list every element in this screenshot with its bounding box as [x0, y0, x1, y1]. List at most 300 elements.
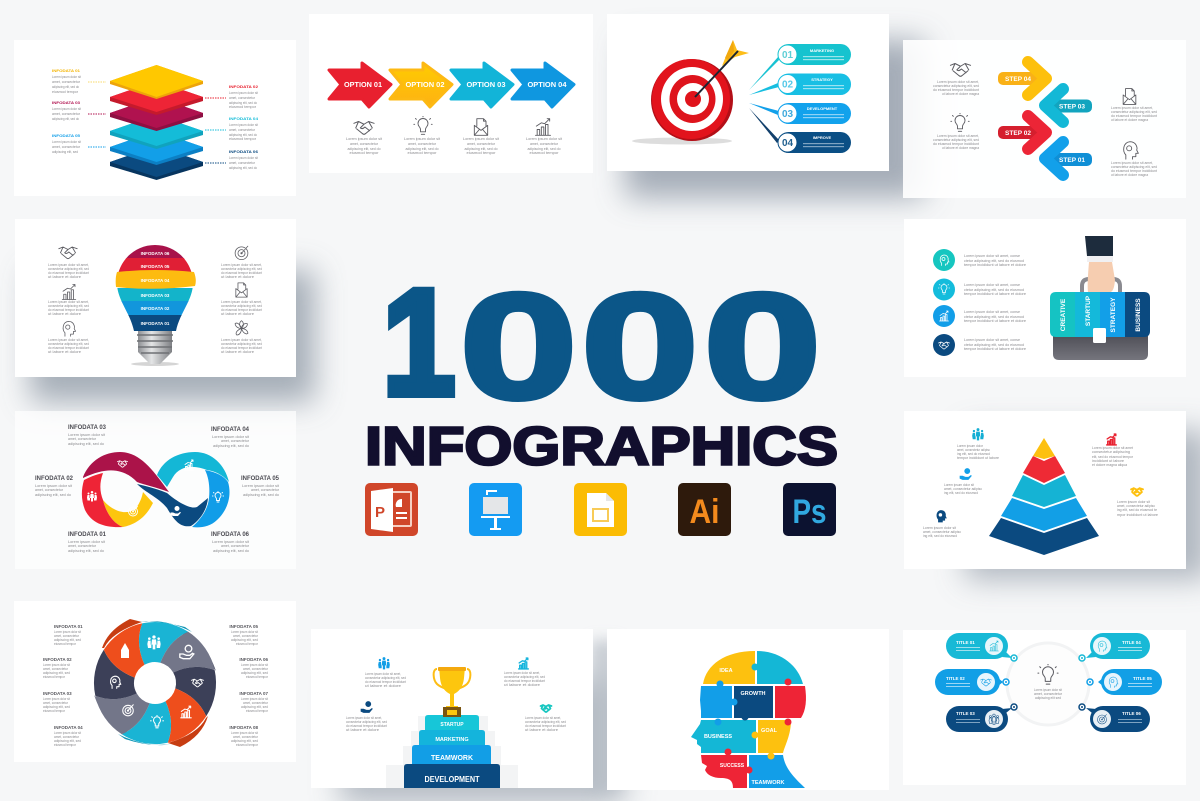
label: infodata 01: Lorem ipsum dolor sit [68, 539, 106, 544]
briefcase with hand: BUSINESS [1135, 298, 1142, 332]
center ring [1007, 643, 1089, 725]
trophy text blocks: do eiusmod tempor incididunt [365, 679, 407, 684]
cycle labels right: Lorem ipsum dolor sit [231, 629, 259, 634]
label: infodata 04: Lorem ipsum dolor sit [212, 434, 250, 439]
pill: title 02 [935, 669, 1003, 695]
step text blocks: Lorem ipsum dolor sit amet, [1111, 160, 1153, 165]
icon: head [937, 510, 947, 522]
pill: title 06 [1086, 706, 1150, 732]
arrow: option 01: OPTION 01 [344, 82, 382, 89]
label: infodata 02: adipiscing elit, sed do [229, 100, 258, 105]
briefcase text blocks: Lorem ipsum dolor sit amet, conse [964, 253, 1021, 258]
label: infodata 06: INFODATA 06 [229, 149, 259, 154]
cycle labels right: Lorem ipsum dolor sit [231, 730, 259, 735]
icon: flower [235, 321, 248, 335]
label: infodata 03: Lorem ipsum dolor sit [52, 106, 82, 111]
label: infodata 06: Lorem ipsum dolor sit [229, 155, 259, 160]
text blocks under arrows: amet, consectetur [467, 141, 496, 146]
label: infodata 06: amet, consectetur [221, 543, 250, 548]
cycle labels left: amet, consectetur [43, 666, 69, 671]
label: infodata 03: adipiscing elit, sed do [68, 441, 105, 446]
bulb text blocks: consectetur adipiscing elit, sed [48, 266, 89, 271]
briefcase text blocks: tempor incididunt ut labore et dolore [964, 318, 1027, 323]
cycle labels right: Lorem ipsum dolor sit [241, 662, 269, 667]
icon: handshake [540, 705, 552, 712]
cycle labels right: adipiscing elit, sed [231, 738, 258, 743]
pyramid text blocks: ing elit, sed do eiusmod [923, 533, 957, 538]
cycle labels right: adipiscing elit, sed [231, 637, 258, 642]
label: infodata 03: amet, consectetur [52, 111, 81, 116]
briefcase text blocks: ctetur adipiscing elit, sed do eiusmod [964, 314, 1024, 319]
text blocks under arrows: Lorem ipsum dolor sit [404, 136, 441, 141]
label: infodata 03 [68, 425, 107, 446]
cycle labels right: INFODATA 07 [239, 691, 268, 696]
bulb text blocks: ut labore et dolore [48, 274, 82, 279]
pyramid text blocks: ing elit, sed do eiusmod [944, 490, 978, 495]
briefcase text blocks [964, 253, 1027, 351]
pyramid text blocks: amet, consectetur adipisc [923, 529, 961, 534]
trophy text blocks: Lorem ipsum dolor sit amet, [504, 670, 540, 675]
step text blocks: ut labore et dolore magna [942, 91, 980, 96]
cycle labels right: INFODATA 08 [229, 725, 258, 730]
pill 01 marketing: 01 [782, 50, 793, 61]
steps: DEVELOPMENT [424, 774, 480, 784]
text blocks under arrows: Lorem ipsum dolor sit [526, 136, 563, 141]
pyramid text blocks: ing elit, sed do eiusmod te [1117, 507, 1158, 512]
cycle labels right: amet, consectetur [233, 734, 259, 739]
pill 01 marketing: MARKETING [810, 48, 834, 53]
steps: STARTUP [440, 722, 464, 728]
label: infodata 06: adipiscing elit, sed do [213, 548, 250, 553]
label: infodata 01: eiusmod tempor [52, 89, 79, 94]
label: infodata 02: amet, consectetur [35, 487, 64, 492]
bulb text blocks: do eiusmod tempor incididunt [48, 307, 90, 312]
label: infodata 03: amet, consectetur [68, 436, 97, 441]
label: infodata 01: adipiscing elit, sed do [52, 84, 80, 89]
pyramid text blocks: Lorem ipsum dolor sit [944, 482, 975, 487]
icon: illustrator: Ai [690, 493, 720, 531]
cycle labels left: Lorem ipsum dolor sit [43, 662, 71, 667]
icon: mail [474, 119, 488, 135]
cycle labels left: INFODATA 02 [43, 657, 72, 662]
briefcase text blocks: tempor incididunt ut labore et dolore [964, 291, 1027, 296]
step text blocks: Lorem ipsum dolor sit amet, [937, 133, 979, 138]
arrow: option 04 [512, 63, 574, 107]
label: infodata 05: amet, consectetur [52, 144, 81, 149]
briefcase text blocks: ctetur adipiscing elit, sed do eiusmod [964, 342, 1024, 347]
panel: puzzle head [607, 629, 889, 790]
pill 04 improve: 04 [782, 138, 793, 149]
label: infodata 01 [52, 68, 82, 94]
trophy text blocks: ut labore et dolore [346, 727, 380, 732]
puzzle head graphic: SUCCESS [720, 763, 745, 769]
pill: title 06: TITLE 06 [1122, 711, 1141, 716]
icon: money hand [361, 701, 373, 713]
connector lines [749, 57, 779, 143]
icon: bulb [951, 113, 969, 131]
arrow: option 03: OPTION 03 [466, 82, 506, 89]
trophy text blocks: consectetur adipiscing elit, sed [525, 719, 566, 724]
briefcase text blocks: tempor incididunt ut labore et dolore [964, 262, 1027, 267]
pyramid text blocks: incididunt ut labore [1092, 458, 1125, 463]
text blocks under arrows: eiusmod tempor [530, 150, 559, 155]
icon: handshake [354, 122, 374, 134]
label: infodata 01: adipiscing elit, sed do [68, 548, 105, 553]
bulb graphic: INFODATA 06 [141, 251, 170, 256]
bulb text blocks: consectetur adipiscing elit, sed [48, 303, 89, 308]
pyramid text blocks: ing elit, sed do eiusmod [957, 451, 990, 456]
label: infodata 02: adipiscing elit, sed do [35, 492, 72, 497]
step text blocks [933, 79, 1158, 177]
step text blocks: consectetur adipiscing elit, sed [933, 137, 979, 142]
target board [632, 59, 733, 144]
label: infodata 03: adipiscing elit, sed do [52, 116, 80, 121]
text blocks under arrows: adipiscing elit, sed do [464, 146, 498, 151]
label: infodata 02: eiusmod tempor [229, 104, 257, 109]
bulb text blocks: do eiusmod tempor incididunt [221, 307, 263, 312]
cycle labels left [43, 624, 83, 747]
pyramid text blocks: consectetur adipiscing [1092, 449, 1130, 454]
puzzle head graphic: GOAL [761, 728, 778, 734]
panel: steps arrows [903, 40, 1186, 198]
cycle labels left: amet, consectetur [54, 633, 80, 638]
text blocks under arrows: eiusmod tempor [466, 150, 496, 155]
panel: briefcase [904, 219, 1186, 377]
icon: people [972, 428, 984, 440]
icon: head [63, 321, 76, 336]
puzzle head graphic: BUSINESS [704, 734, 732, 740]
text blocks under arrows: amet, consectetur [530, 141, 559, 146]
cycle labels right: amet, consectetur [243, 666, 269, 671]
label: infodata 06: adipiscing elit, sed do [229, 165, 258, 170]
bulb text blocks: do eiusmod tempor incididunt [48, 345, 90, 350]
trophy text blocks: ut labore et dolore [525, 727, 559, 732]
briefcase text blocks: Lorem ipsum dolor sit amet, conse [964, 337, 1021, 342]
label: infodata 06: amet, consectetur [229, 160, 256, 165]
icon: target [235, 246, 248, 260]
step text blocks: consectetur adipiscing elit, sed [1111, 164, 1157, 169]
label: infodata 06 [229, 149, 259, 170]
trophy text blocks: do eiusmod tempor incididunt [525, 723, 567, 728]
arrow: step 03: STEP 03 [1059, 104, 1085, 110]
icon: powerpoint: P [375, 504, 385, 521]
label: infodata 04: INFODATA 04 [211, 427, 250, 433]
label: infodata 01: INFODATA 01 [68, 532, 107, 538]
step text blocks: ut labore et dolore magna [942, 145, 980, 150]
cycle labels right: INFODATA 06 [239, 657, 268, 662]
cycle labels right: amet, consectetur [243, 700, 269, 705]
title: infographics: INFOGRAPHICS [365, 416, 838, 476]
label: infodata 01: amet, consectetur [52, 79, 81, 84]
arrow: step 02: STEP 02 [1005, 130, 1031, 137]
step text blocks: consectetur adipiscing elit, sed [933, 83, 979, 88]
bulb text blocks [48, 262, 263, 354]
icon: photoshop [783, 483, 836, 536]
label: infodata 03: Lorem ipsum dolor sit [68, 432, 106, 437]
steps [404, 715, 500, 788]
text blocks under arrows [346, 136, 563, 155]
cycle labels left: Lorem ipsum dolor sit [54, 629, 82, 634]
label: infodata 04 [211, 427, 250, 448]
label: infodata 05: Lorem ipsum dolor sit [52, 139, 82, 144]
puzzle head graphic: IDEA [719, 668, 733, 674]
pyramid text blocks: Lorem ipsum dolor sit [923, 525, 957, 530]
trophy text blocks [346, 670, 567, 732]
arrow: step 02 [998, 116, 1046, 149]
label: infodata 04: adipiscing elit, sed do [213, 443, 250, 448]
bulb text blocks: do eiusmod tempor incididunt [221, 270, 263, 275]
cycle labels left: eiusmod tempor [54, 641, 77, 646]
center ring: amet, consectetur [1034, 691, 1063, 696]
pyramid text blocks [923, 443, 1159, 538]
label: infodata 04: eiusmod tempor [229, 136, 257, 141]
step text blocks: ut labore et dolore magna [1111, 117, 1149, 122]
pill: title 05 [1098, 669, 1162, 695]
step text blocks: Lorem ipsum dolor sit amet, [1111, 105, 1153, 110]
cycle labels left: INFODATA 01 [54, 624, 83, 629]
label: infodata 01: Lorem ipsum dolor sit [52, 74, 82, 79]
text blocks under arrows: amet, consectetur [408, 141, 437, 146]
label: infodata 01: INFODATA 01 [52, 68, 81, 73]
cycle labels left: eiusmod tempor [54, 742, 77, 747]
cycle ring [94, 619, 216, 747]
label: infodata 02: amet, consectetur [229, 95, 256, 100]
trophy text blocks: ut labore et dolore [365, 683, 402, 688]
bulb text blocks: Lorem ipsum dolor sit amet, [221, 337, 262, 342]
briefcase with hand: STARTUP [1085, 295, 1092, 326]
pill 02 strategy: 02 [782, 80, 793, 90]
cycle labels left: amet, consectetur [43, 700, 69, 705]
label: infodata 02 [35, 476, 74, 497]
pyramid text blocks: mpor incididunt ut labore [1117, 512, 1159, 517]
pill 02 strategy [778, 74, 851, 95]
bulb graphic: INFODATA 01 [141, 321, 170, 326]
pyramid text blocks: elit, sed do eiusmod tempor [1092, 454, 1134, 459]
label: infodata 01 [68, 532, 107, 553]
arrow: option 02 [390, 63, 452, 107]
label: infodata 05: INFODATA 05 [241, 476, 280, 482]
trophy text blocks: ut labore et dolore [504, 682, 541, 687]
label: infodata 06: Lorem ipsum dolor sit [212, 539, 250, 544]
bulb text blocks: Lorem ipsum dolor sit amet, [48, 262, 89, 267]
pill: title 04: TITLE 04 [1122, 640, 1141, 645]
label: infodata 05: adipiscing elit, sed [52, 149, 78, 154]
icon: bulb [414, 116, 432, 134]
pyramid text blocks: amet, consectetur adipisc [957, 447, 990, 452]
bulb text blocks: do eiusmod tempor incididunt [48, 270, 90, 275]
icon: chart [519, 658, 528, 669]
pill: title 05: TITLE 05 [1133, 676, 1152, 681]
cycle labels left: adipiscing elit, sed [54, 738, 81, 743]
step text blocks: Lorem ipsum dolor sit amet, [937, 79, 979, 84]
bulb graphic: INFODATA 03 [141, 293, 170, 298]
title: 1000: 000 [460, 262, 821, 430]
cycle labels left: Lorem ipsum dolor sit [54, 730, 82, 735]
puzzle head graphic [691, 651, 806, 788]
text blocks under arrows: adipiscing elit, sed do [528, 146, 561, 151]
cycle labels right: INFODATA 05 [229, 624, 258, 629]
title: 1000: 1 [383, 258, 455, 426]
trophy text blocks: do eiusmod tempor incididunt [504, 678, 546, 683]
pill: title 04 [1086, 633, 1150, 659]
bulb text blocks: Lorem ipsum dolor sit amet, [48, 337, 89, 342]
trophy text blocks: Lorem ipsum dolor sit amet, [525, 715, 561, 720]
icon: people [378, 657, 390, 669]
panel: title pills [903, 630, 1186, 785]
arrow: step 04: STEP 04 [1005, 76, 1031, 83]
bulb text blocks: ut labore et dolore [48, 349, 82, 354]
text blocks under arrows: adipiscing elit, sed do [348, 146, 381, 151]
dart [695, 40, 749, 97]
briefcase with hand [1050, 236, 1150, 360]
bulb text blocks: ut labore et dolore [221, 311, 255, 316]
label: infodata 04: adipiscing elit, sed do [229, 132, 258, 137]
pyramid graphic [989, 438, 1099, 555]
label: infodata 02 [229, 84, 259, 109]
bulb graphic: INFODATA 05 [141, 264, 170, 269]
cycle labels right: adipiscing elit, sed [241, 704, 268, 709]
label: infodata 01: amet, consectetur [68, 543, 97, 548]
briefcase text blocks: tempor incididunt ut labore et dolore [964, 346, 1027, 351]
bulb text blocks: Lorem ipsum dolor sit amet, [221, 299, 262, 304]
pyramid text blocks: Lorem ipsum dolor sit [1117, 499, 1151, 504]
briefcase text blocks: Lorem ipsum dolor sit amet, conse [964, 309, 1021, 314]
label: infodata 05 [241, 476, 280, 497]
pill 01 marketing [778, 44, 851, 65]
pill 04 improve [778, 132, 851, 153]
panel: light bulb [15, 219, 296, 377]
bulb text blocks: ut labore et dolore [221, 274, 255, 279]
trophy [434, 667, 470, 717]
text blocks under arrows: eiusmod tempor [408, 150, 437, 155]
cycle labels right [229, 624, 269, 747]
label: infodata 05: adipiscing elit, sed do [243, 492, 280, 497]
connector dots [1003, 655, 1093, 710]
pill: title 01 [946, 633, 1012, 659]
panel: trophy steps [311, 629, 593, 788]
bulb text blocks: consectetur adipiscing elit, sed [221, 303, 262, 308]
label: infodata 02: INFODATA 02 [35, 476, 74, 482]
bulb graphic: INFODATA 02 [141, 306, 170, 311]
label: infodata 02: Lorem ipsum dolor sit [35, 483, 73, 488]
text blocks under arrows: adipiscing elit, sed do [406, 146, 439, 151]
label: infodata 03: INFODATA 03 [52, 100, 81, 105]
cycle labels left: INFODATA 04 [54, 725, 83, 730]
briefcase with hand: STRATEGY [1110, 297, 1117, 332]
pyramid text blocks: amet, consectetur adipisc [1117, 503, 1155, 508]
pyramid text blocks: Lorem ipsum dolor sit amet [1092, 445, 1134, 450]
step text blocks: ut labore et dolore magna [1111, 172, 1149, 177]
arrow: step 03 [1045, 89, 1092, 122]
trophy text blocks: consectetur adipiscing elit, sed [346, 719, 387, 724]
icon: chart [62, 284, 76, 300]
icon: chart [536, 119, 550, 135]
pyramid text blocks: et dolore magna aliqua [1092, 462, 1128, 467]
cycle labels left: eiusmod tempor [43, 708, 66, 713]
bulb text blocks: consectetur adipiscing elit, sed [48, 341, 89, 346]
steps: MARKETING [435, 737, 469, 743]
icon: handshake [1131, 488, 1143, 496]
cycle labels right: eiusmod tempor [236, 742, 259, 747]
text blocks under arrows: Lorem ipsum dolor sit [346, 136, 383, 141]
icon: handshake [59, 247, 77, 259]
trophy text blocks: Lorem ipsum dolor sit amet, [346, 715, 382, 720]
briefcase with hand: CREATIVE [1060, 298, 1067, 331]
bulb graphic [116, 245, 196, 366]
icon: google slides [574, 483, 627, 536]
text blocks under arrows: eiusmod tempor [350, 150, 379, 155]
label: infodata 05: INFODATA 05 [52, 133, 81, 138]
background steps [386, 716, 518, 788]
icon: head [1124, 142, 1138, 159]
icon: handshake [950, 64, 971, 76]
pill: title 03: TITLE 03 [956, 711, 975, 716]
cycle labels left: adipiscing elit, sed [43, 670, 70, 675]
pill 04 improve: IMPROVE [813, 135, 832, 140]
stacked diamond layers [110, 65, 203, 180]
icon: keynote [469, 483, 522, 536]
label: infodata 02: Lorem ipsum dolor sit [229, 90, 259, 95]
pill 02 strategy: STRATEGY [811, 77, 833, 82]
arrow: step 01: STEP 01 [1059, 157, 1085, 164]
label: infodata 04: amet, consectetur [221, 438, 250, 443]
cycle labels left: adipiscing elit, sed [43, 704, 70, 709]
cycle labels left: INFODATA 03 [43, 691, 72, 696]
icon circles [933, 249, 955, 356]
cycle labels right: adipiscing elit, sed [241, 670, 268, 675]
cycle labels left: amet, consectetur [54, 734, 80, 739]
arrow: option 04: OPTION 04 [528, 82, 567, 89]
icon: photoshop: Ps [792, 493, 826, 531]
briefcase text blocks: ctetur adipiscing elit, sed do eiusmod [964, 287, 1024, 292]
bulb text blocks: do eiusmod tempor incididunt [221, 345, 263, 350]
trophy text blocks: consectetur adipiscing elit, sed [365, 675, 406, 680]
trophy text blocks: Lorem ipsum dolor sit amet, [365, 671, 401, 676]
bulb text blocks: consectetur adipiscing elit, sed [221, 341, 262, 346]
text blocks under arrows: amet, consectetur [350, 141, 379, 146]
cycle labels left: Lorem ipsum dolor sit [43, 696, 71, 701]
label: infodata 05 [52, 133, 82, 154]
bulb text blocks: Lorem ipsum dolor sit amet, [221, 262, 262, 267]
trophy text blocks: consectetur adipiscing elit, sed [504, 674, 545, 679]
panel: infinity loop [15, 411, 296, 569]
infinity graphic [82, 452, 230, 527]
label: infodata 03: INFODATA 03 [68, 425, 107, 431]
pill: title 01: TITLE 01 [956, 640, 975, 645]
cycle labels left: adipiscing elit, sed [54, 637, 81, 642]
step text blocks: consectetur adipiscing elit, sed [1111, 109, 1157, 114]
pill: title 03 [946, 706, 1012, 732]
label: infodata 05: amet, consectetur [251, 487, 280, 492]
arrow: option 01 [329, 63, 391, 107]
icon: mail [236, 283, 247, 297]
panel: target [607, 14, 889, 171]
trophy text blocks: do eiusmod tempor incididunt [346, 723, 388, 728]
icon: chart [1107, 434, 1116, 445]
step text blocks: do eiusmod tempor incididunt [933, 87, 980, 92]
panel: pyramid [904, 411, 1186, 569]
text blocks under arrows: Lorem ipsum dolor sit [463, 136, 500, 141]
bulb text blocks: ut labore et dolore [221, 349, 255, 354]
icon: illustrator [678, 483, 731, 536]
cycle labels left: eiusmod tempor [43, 674, 66, 679]
arrow: step 04 [998, 62, 1046, 95]
center ring: Lorem ipsum dolor sit [1034, 687, 1063, 692]
pyramid text blocks: tempor incididunt ut labore [957, 455, 1000, 460]
label: infodata 03 [52, 100, 82, 121]
panel: option arrows [309, 14, 593, 173]
label: infodata 04: INFODATA 04 [229, 116, 259, 121]
